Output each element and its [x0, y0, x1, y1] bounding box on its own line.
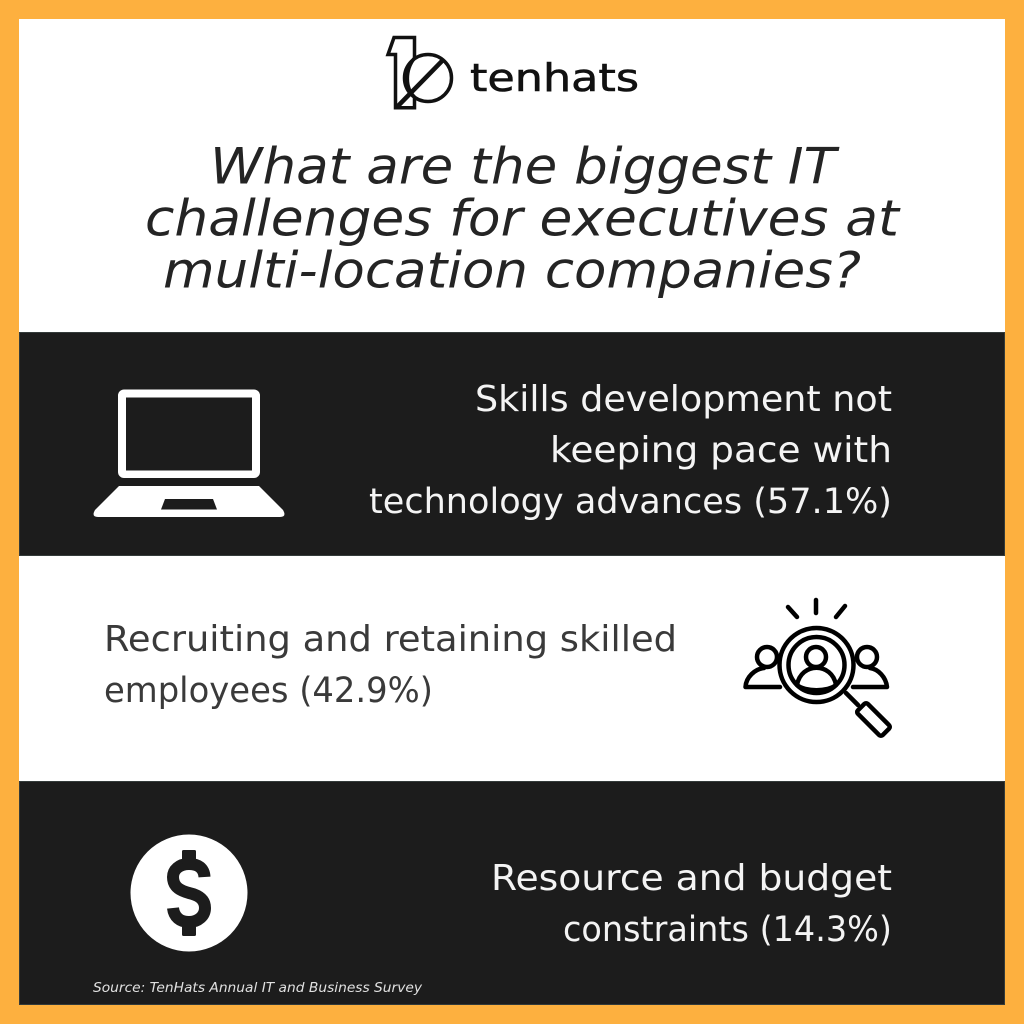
text: recruiting: employees (42.9%): [104, 671, 433, 711]
panel: budget constraints: [20, 782, 1004, 1004]
text: recruiting: Recruiting and retaining skilled: [104, 619, 677, 660]
text: skills development: [369, 379, 892, 522]
logo wordmark: tenhats: [470, 56, 639, 100]
text: skills development: Skills development not: [475, 379, 892, 420]
panel background: [20, 782, 1004, 1004]
title: multi-location companies?: [163, 242, 861, 300]
text: budget constraints: [491, 858, 892, 950]
panel background: [20, 332, 1004, 556]
title: [145, 138, 902, 300]
panel: skills development: [20, 332, 1004, 556]
logo: tenhats: [388, 38, 639, 108]
title: What are the biggest IT: [210, 138, 840, 196]
text: budget constraints: constraints (14.3%): [563, 910, 892, 950]
text: budget constraints: Resource and budget: [491, 858, 892, 899]
source note: Source: TenHats Annual IT and Business Survey: [93, 981, 422, 996]
logo mark: outlined one and slashed circle: [388, 38, 452, 108]
text: skills development: technology advances (57.1%): [369, 482, 892, 522]
text: recruiting: [104, 619, 677, 711]
icon: laptop: [94, 390, 284, 517]
panel: recruiting: [104, 600, 891, 737]
icon: dollar coin: [130, 834, 248, 952]
icon: magnifying glass over people: [746, 600, 891, 737]
text: skills development: keeping pace with: [550, 430, 892, 471]
title: challenges for executives at: [145, 190, 902, 248]
